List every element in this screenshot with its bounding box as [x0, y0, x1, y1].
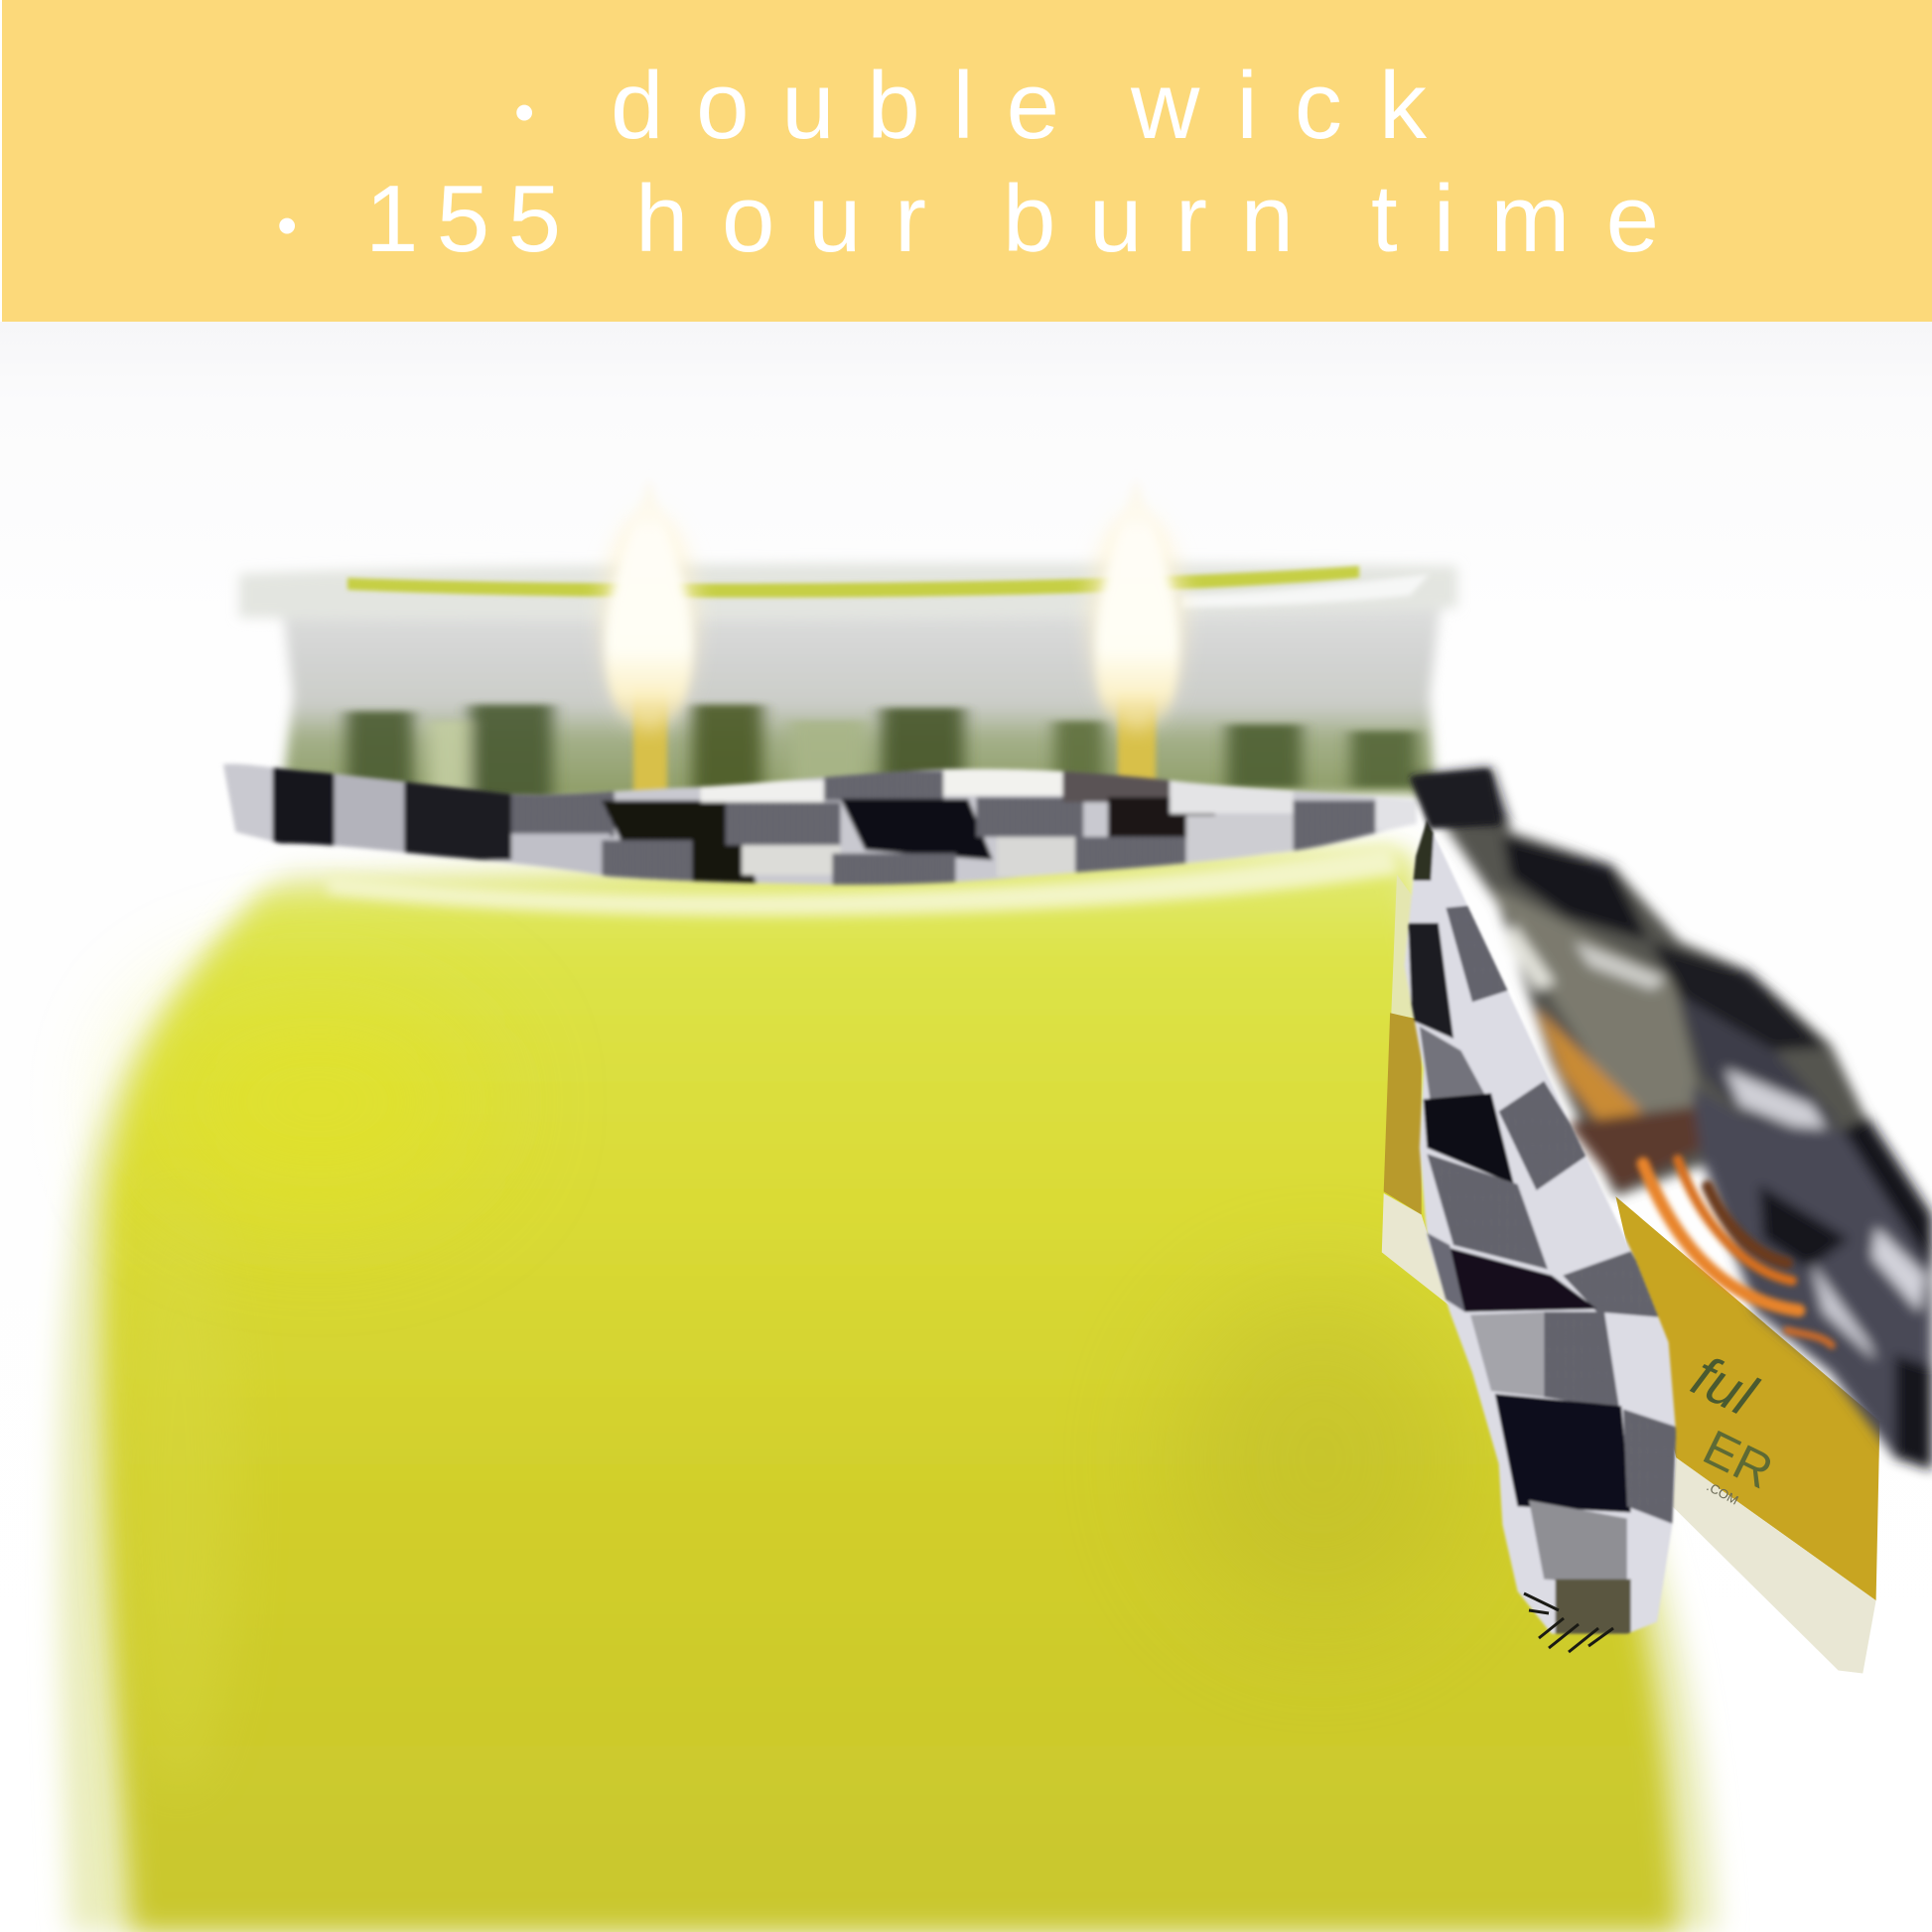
feature: double wick: wick [1130, 53, 1428, 159]
price tag [1382, 875, 1879, 1674]
photo: candle jar [58, 477, 1932, 1932]
feature: 155 hour burn time: time [1371, 166, 1659, 272]
feature: double wick: double [611, 53, 1059, 159]
header banner [2, 0, 1932, 322]
feature: 155 hour burn time [277, 166, 1659, 272]
tag right part [1615, 1196, 1879, 1600]
neck base highlight [328, 844, 1400, 916]
wick left [633, 685, 667, 796]
wick right [1118, 690, 1156, 789]
flame right [1096, 477, 1178, 725]
frayed ribbon end [1524, 1593, 1613, 1652]
tag left part [1391, 875, 1427, 1021]
feature: 155 hour burn time: 155 [365, 166, 561, 272]
wax body [103, 854, 1678, 1932]
feature: 155 hour burn time: hour [635, 166, 926, 272]
front ribbon tail [1404, 820, 1678, 1636]
price tag: .COM [1705, 1478, 1741, 1508]
orange swirl on tag [1643, 1160, 1832, 1345]
feature: 155 hour burn time: • [277, 194, 297, 258]
feature: 155 hour burn time: burn [1003, 166, 1294, 272]
flame glow left [600, 511, 699, 730]
jar neck glass [281, 596, 1442, 804]
wax colour shading [119, 993, 1469, 1787]
feature: double wick: • [514, 80, 534, 145]
tag script text: ful [1682, 1343, 1767, 1429]
feature: double wick [514, 53, 1428, 159]
flame left [606, 477, 692, 725]
jar glass halo [58, 854, 1718, 1932]
reflections of wax in neck [346, 705, 1417, 797]
price tag: ER [1695, 1420, 1781, 1499]
jar rim [239, 563, 1457, 620]
flame glow right [1087, 511, 1186, 730]
ribbon around neck [222, 762, 1418, 888]
banner background [2, 0, 1932, 322]
back ribbon tail and tag photo [1412, 768, 1932, 1470]
ribbon knot [1410, 769, 1499, 829]
